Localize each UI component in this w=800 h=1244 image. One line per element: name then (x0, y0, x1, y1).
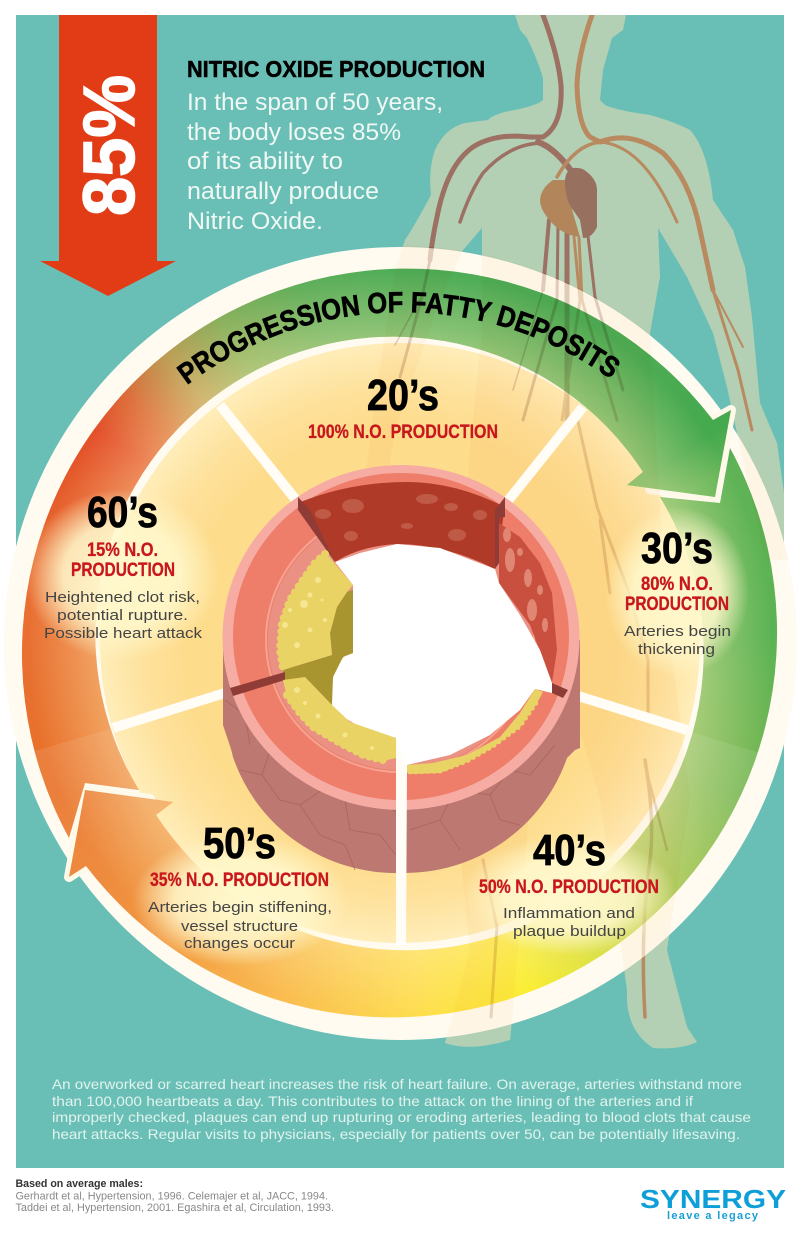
inner cream disc with sectors (100, 343, 700, 943)
intro paragraph: naturally produce (187, 178, 379, 205)
top face of artery: pale rim and coral lining (222, 465, 580, 810)
footnote references: Gerhardt et al, Hypertension, 1996. Celemajer et al, JACC, 1994. (16, 1190, 328, 1202)
label: 30s: 80% N.O. (641, 574, 713, 595)
intro paragraph: In the span of 50 years, (187, 89, 443, 116)
label: 30s: thickening (638, 641, 715, 658)
logo: synergy (640, 1184, 786, 1222)
label: 50s: vessel structure (181, 918, 298, 935)
label: 50s: changes occur (184, 935, 295, 952)
arteries showing through the circle (394, 247, 668, 1018)
label: 60s: PRODUCTION (71, 560, 175, 581)
60s slice: olive cut face of plaque (283, 590, 353, 705)
body silhouette showing through the circle (379, 246, 788, 1037)
label: 20s (308, 371, 498, 443)
footnote references (16, 1178, 334, 1214)
bottom paragraph: than 100,000 heartbeats a day. This contributes to the attack on the lining of the arteries and if (52, 1093, 693, 1109)
bottom paragraph (52, 1076, 751, 1142)
label: 50s: Arteries begin stiffening, (148, 899, 332, 916)
label: 20s: 20’s (367, 371, 439, 420)
open lumen of the artery (331, 544, 552, 945)
ring arrow: yellow to orange arrow along the bottom (69, 448, 778, 1018)
heading: nitric oxide production: NITRIC OXIDE PRODUCTION (187, 56, 485, 82)
label: 30s: 30’s (641, 524, 713, 573)
logo: synergy: leave a legacy (667, 1210, 759, 1222)
intro paragraph: Nitric Oxide. (187, 208, 323, 235)
curved heading: progression of fatty deposits: PROGRESSION OF FATTY DEPOSITS (176, 292, 620, 384)
label: 50s: 35% N.O. PRODUCTION (150, 870, 329, 891)
20s slice: healthy dark red wall (298, 482, 505, 569)
label: 30s: Arteries begin (624, 623, 731, 640)
footnote references: Based on average males: (16, 1178, 143, 1190)
outer white ring of the circle (4, 246, 796, 1040)
bottom paragraph: An overworked or scarred heart increases the risk of heart failure. On average, arteries withstand more (52, 1076, 742, 1092)
label: 20s: 100% N.O. PRODUCTION (308, 422, 498, 443)
cut strips between slices (230, 672, 568, 698)
bottom paragraph: improperly checked, plaques can end up rupturing or eroding arteries, leading to blood clots that cause (52, 1109, 751, 1125)
label: 40s: Inflammation and (503, 905, 635, 922)
illustration: human body silhouette with arteries (402, 15, 784, 1048)
intro paragraph: the body loses 85% (187, 119, 401, 146)
label: 30s (605, 506, 749, 678)
label: 60s: potential rupture. (57, 607, 188, 624)
intro paragraph (187, 89, 443, 235)
label: 40s: 50% N.O. PRODUCTION (479, 877, 659, 898)
logo: synergy: SYNERGY (640, 1184, 786, 1214)
footnote references: Taddei et al, Hypertension, 2001. Egashira et al, Circulation, 1993. (16, 1202, 334, 1214)
30s slice: thickening spotted wall (499, 523, 557, 683)
label: 60s (24, 488, 220, 661)
red 85 percent down arrow: 85% (70, 75, 150, 216)
label: 60s: 60’s (87, 488, 158, 537)
outer artery wall (223, 640, 580, 873)
label: 30s: PRODUCTION (625, 594, 729, 615)
white spoke through artery front (396, 738, 406, 942)
bottom paragraph: heart attacks. Regular visits to physicians, especially for patients over 50, can be potentially lifesaving. (52, 1126, 740, 1142)
ring arrow: green progression arrow over the top (22, 268, 731, 838)
intro paragraph: of its ability to (187, 148, 343, 175)
label: 50s (132, 819, 348, 966)
label: 60s: Heightened clot risk, (45, 589, 200, 606)
label: 40s: 40’s (533, 826, 606, 875)
label: 40s (461, 826, 677, 955)
label: 60s: Possible heart attack (44, 625, 203, 642)
arteries and heart (395, 15, 752, 1017)
label: 60s: 15% N.O. (87, 540, 158, 561)
label: 40s: plaque buildup (513, 923, 626, 940)
label: 50s: 50’s (203, 819, 276, 868)
60s slice: thick yellow plaque (280, 552, 353, 670)
40s slice: thin yellow plaque (407, 689, 543, 774)
50s slice: yellow plaque band (283, 677, 396, 761)
body silhouette (402, 15, 784, 1048)
